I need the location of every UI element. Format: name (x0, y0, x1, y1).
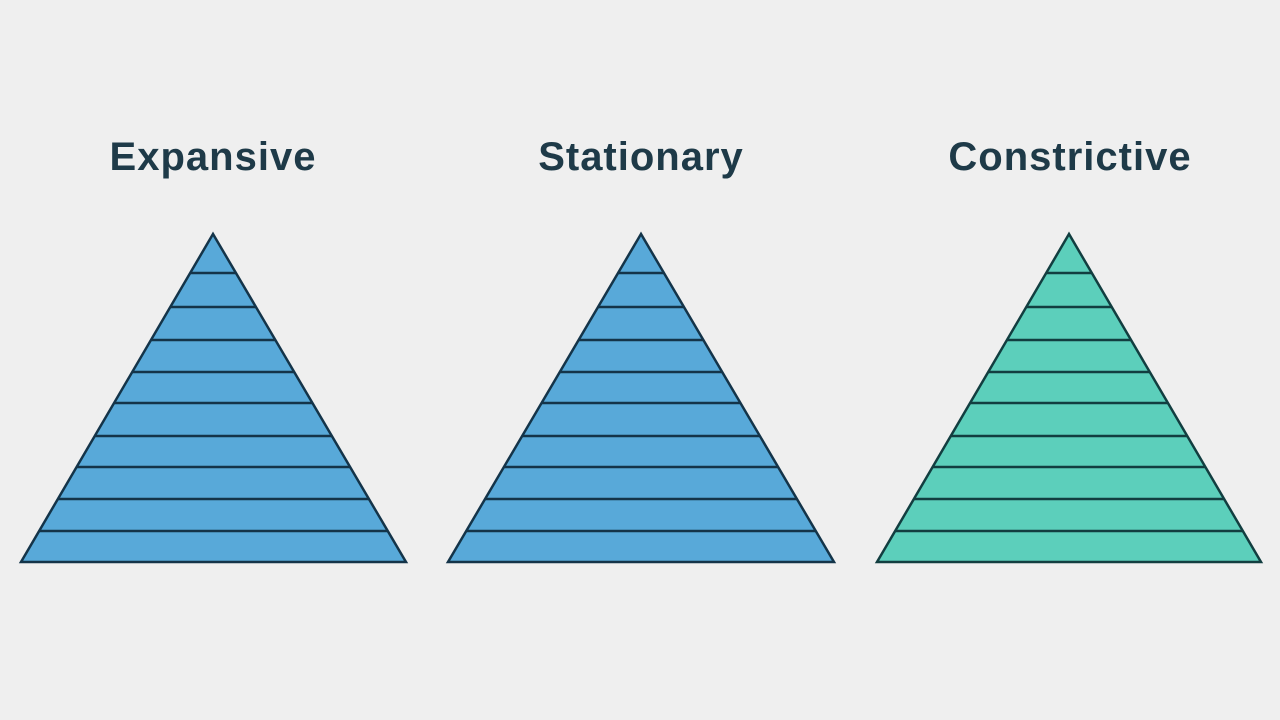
pyramid: expansive (18, 232, 408, 564)
pyramid: stationary (446, 232, 836, 564)
pyramid: constrictive (850, 234, 1280, 562)
title: Expansive: Expansive (110, 135, 316, 179)
title: Constrictive: Constrictive (948, 135, 1192, 179)
title: Stationary: Stationary (538, 135, 744, 179)
